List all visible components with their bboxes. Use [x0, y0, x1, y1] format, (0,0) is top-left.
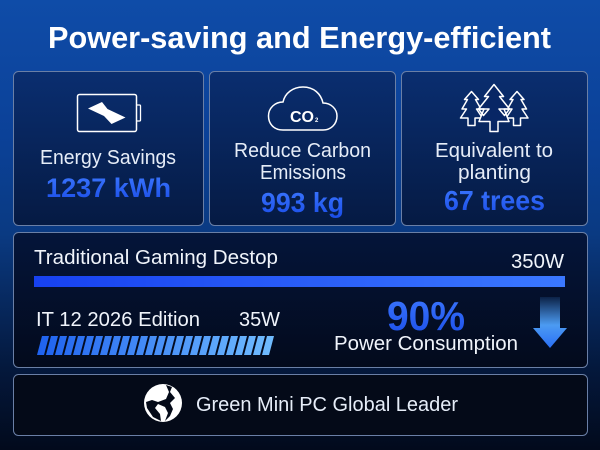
value: carbon: 993 kg	[261, 187, 344, 218]
icon: co2 cloud: 2	[315, 118, 319, 124]
label: reduce carbon emissions: Emissions	[260, 162, 346, 184]
bar: 35W striped	[37, 336, 274, 355]
label: green mini pc: Green Mini PC Global Leader	[196, 394, 458, 416]
icon: down arrow	[533, 297, 567, 348]
panel: reduce carbon emissions	[210, 72, 396, 226]
icon: globe	[144, 384, 182, 422]
label: equivalent to planting: Equivalent to	[435, 140, 553, 162]
panel: energy savings	[14, 72, 204, 226]
title: Power-saving and Energy-efficient	[48, 20, 551, 55]
icon: trees	[460, 84, 528, 132]
panel: power comparison	[14, 232, 588, 368]
icon: co2 cloud	[268, 87, 337, 130]
label: equivalent to planting	[435, 140, 553, 184]
icon: co2 cloud: CO	[290, 109, 314, 126]
label: power consumption: Power Consumption	[334, 333, 518, 355]
panel: global leader	[14, 374, 588, 436]
label: reduce carbon emissions	[234, 140, 371, 184]
label: equivalent to planting: planting	[458, 162, 531, 184]
value: 90%: 90%	[387, 293, 465, 339]
label: energy savings: Energy Savings	[40, 147, 176, 169]
label: traditional desktop: Traditional Gaming Destop	[34, 247, 278, 269]
bar: 350W	[34, 276, 565, 287]
value: 35W: 35W	[239, 309, 280, 331]
label: IT 12: IT 12 2026 Edition	[36, 309, 200, 331]
value: trees: 67 trees	[444, 185, 545, 216]
label: reduce carbon emissions: Reduce Carbon	[234, 140, 371, 162]
panel: equivalent trees	[402, 72, 588, 226]
icon: battery with bolt	[78, 94, 140, 132]
value: 350W: 350W	[511, 251, 564, 273]
value: energy savings: 1237 kWh	[46, 173, 171, 203]
